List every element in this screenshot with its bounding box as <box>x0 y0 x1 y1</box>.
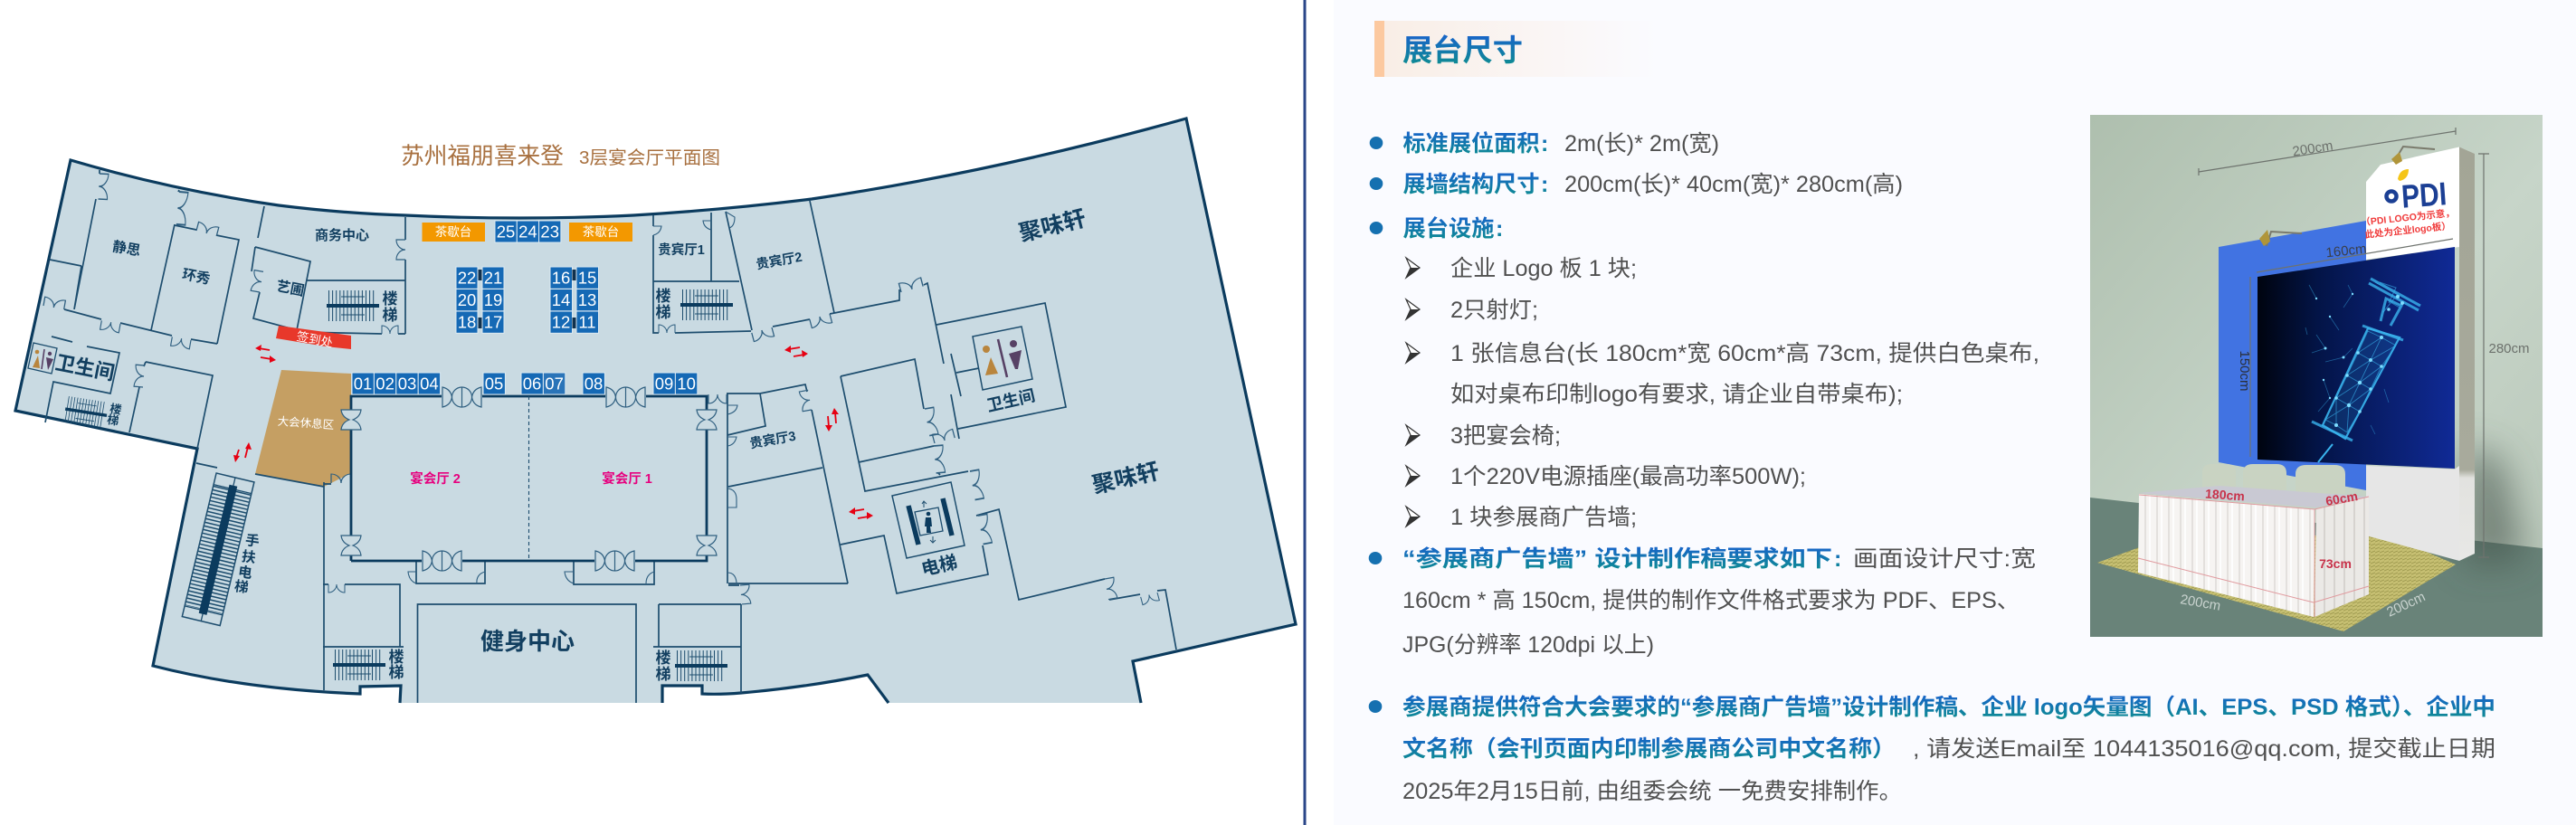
logo: PDI: PDI <box>2400 175 2448 215</box>
booth numbers: 18 <box>458 313 476 331</box>
room labels: 楼 <box>655 288 671 305</box>
facility lines: 1个220V电源插座(最高功率500W); <box>1450 464 1806 489</box>
dimension labels: 73cm <box>2319 556 2352 571</box>
item: submission notice: 文名称（会刊页面内印制参展商公司中文名称） <box>1402 735 1896 762</box>
room labels: 卫生间 <box>53 351 117 384</box>
room labels: 环秀 <box>181 266 212 288</box>
label: banquet hall 2: 宴会厅 2 <box>410 470 461 487</box>
room labels: 梯 <box>233 578 250 596</box>
floor area fill <box>15 119 1296 703</box>
booth numbers: 23 <box>540 223 559 241</box>
chairs <box>2202 464 2345 494</box>
item: wall size: 展墙结构尺寸 <box>1402 172 1540 197</box>
booth numbers: 02 <box>375 375 394 393</box>
item: ad wall design requirement: JPG(分辨率 120dpi 以上) <box>1402 632 1654 658</box>
label: banquet hall 1: 宴会厅 1 <box>602 470 652 487</box>
booth numbers: 24 <box>518 223 537 241</box>
item: submission notice: , 请发送Email至 1044135016@qq.com, 提交截止日期 <box>1913 736 2495 762</box>
stair symbols <box>64 296 733 675</box>
white logo board <box>2366 147 2459 260</box>
title: hotel floor plan <box>401 144 720 169</box>
booth numbers: 20 <box>458 290 476 309</box>
dimension labels: 160cm <box>2325 242 2367 261</box>
dimension labels: 150cm <box>2237 350 2252 392</box>
booth numbers: 06 <box>523 375 541 393</box>
outer walls <box>15 119 1296 703</box>
illustration: booth rendering <box>2090 115 2543 637</box>
logo placeholder note: 此处为企业logo板） <box>2364 220 2451 241</box>
item: standard area <box>1370 130 1719 156</box>
item: facilities heading: 展台设施 <box>1402 215 1495 242</box>
item: ad wall design requirement: 160cm * 高 150cm, 提供的制作文件格式要求为 PDF、EPS、 <box>1402 588 2020 613</box>
item: wall size: : <box>1541 172 1548 197</box>
wall backdrop <box>2090 115 2543 637</box>
icon: left restroom sign <box>28 343 57 374</box>
title: hotel floor plan: 苏州福朋喜来登 <box>401 144 564 169</box>
dimension labels: 200cm <box>2384 589 2428 621</box>
item: standard area: : <box>1541 131 1548 156</box>
spot lamps <box>2259 147 2435 246</box>
room labels: 艺圃 <box>275 278 306 299</box>
item: standard area: 2m(长)* 2m(宽) <box>1564 131 1719 156</box>
booth numbers: 21 <box>484 268 502 288</box>
room labels: 梯 <box>106 412 120 428</box>
room labels: 楼 <box>109 402 123 417</box>
booth numbers: 14 <box>552 290 570 309</box>
lounge zone <box>255 370 351 487</box>
panel: floor plan <box>15 119 1296 703</box>
divider line <box>1303 0 1307 825</box>
room labels: 商务中心 <box>315 227 369 243</box>
room labels: 楼 <box>389 649 404 666</box>
item: wall size: 200cm(长)* 40cm(宽)* 280cm(高) <box>1564 172 1903 197</box>
item: ad wall design requirement: 画面设计尺寸:宽 <box>1853 546 2036 572</box>
wall shadow <box>2466 443 2524 565</box>
facility lines: 如对桌布印制logo有要求, 请企业自带桌布); <box>1450 382 1903 407</box>
item: ad wall design requirement <box>1369 545 2036 658</box>
booth blue wall <box>2219 221 2366 490</box>
sign-in desk: 签到处 <box>296 328 335 350</box>
doors <box>43 174 1159 605</box>
logo: PDI <box>2387 169 2448 215</box>
facility lines <box>1450 256 2039 530</box>
booth numbers: 16 <box>552 268 570 288</box>
carpet <box>2097 536 2456 631</box>
dimension labels: 180cm <box>2205 486 2245 504</box>
dimension labels: 200cm <box>2179 592 2222 614</box>
item: facilities heading <box>1370 215 1503 242</box>
syringe graphic <box>2305 279 2420 462</box>
exhibitor booths <box>352 221 698 394</box>
white lower wall <box>2366 466 2459 561</box>
room labels: 电 <box>237 564 253 582</box>
room labels: 手 <box>244 531 261 550</box>
booth numbers: 05 <box>485 375 503 393</box>
booth numbers: 04 <box>420 375 439 393</box>
icon: right restroom sign <box>973 327 1032 390</box>
facility lines: 1 张信息台(长 180cm*宽 60cm*高 73cm, 提供白色桌布, <box>1450 341 2039 366</box>
booth numbers: 03 <box>398 375 416 393</box>
facility lines: 2只射灯; <box>1450 298 1538 323</box>
booth numbers: 01 <box>354 375 372 393</box>
room labels: 聚味轩 <box>1016 205 1088 247</box>
booth numbers: 12 <box>552 313 570 331</box>
facility lines: 1 块参展商广告墙; <box>1450 505 1637 530</box>
lounge zone: 大会休息区 <box>277 414 335 431</box>
room labels: 贵宾厅1 <box>658 242 705 258</box>
dimension lines <box>2199 128 2489 557</box>
facility lines: 企业 Logo 板 1 块; <box>1450 256 1637 281</box>
booth side panel <box>2459 147 2475 561</box>
room labels: 贵宾厅2 <box>755 249 803 272</box>
info table <box>2138 486 2369 617</box>
graphic screen <box>2258 247 2455 469</box>
arrows: red direction arrows <box>233 345 873 519</box>
room labels <box>53 205 1162 683</box>
room labels: 楼 <box>382 290 398 308</box>
item: submission notice: 参展商提供符合大会要求的“参展商广告墙”设计制作稿、企业 logo矢量图（AI、EPS、PSD 格式）、企业中 <box>1402 694 2495 720</box>
dimension labels: 280cm <box>2488 341 2530 356</box>
heading: 展台尺寸 <box>1374 21 1657 77</box>
arrow bullets <box>1406 258 1420 526</box>
item: standard area: 标准展位面积 <box>1402 130 1540 156</box>
booth numbers: 15 <box>578 268 596 288</box>
booth numbers: 25 <box>497 223 515 241</box>
booth numbers: 10 <box>677 375 696 393</box>
floor <box>2090 498 2543 637</box>
dimension labels: 60cm <box>2324 488 2359 508</box>
booth numbers: 22 <box>458 268 476 288</box>
booth numbers: 13 <box>578 290 596 309</box>
panel: right background <box>1334 0 2576 825</box>
item: submission notice: 2025年2月15日前, 由组委会统 一免费安排制作。 <box>1402 779 1902 804</box>
logo placeholder note <box>2361 207 2455 241</box>
booth numbers: 09 <box>655 375 673 393</box>
booth numbers: 17 <box>484 313 502 331</box>
room labels: 楼 <box>655 650 671 667</box>
heading: 展台尺寸: 展台尺寸 <box>1402 33 1523 67</box>
interior walls <box>45 170 1176 703</box>
booth numbers: 07 <box>545 375 564 393</box>
room labels: 梯 <box>655 304 671 321</box>
room labels: 梯 <box>389 664 404 681</box>
booth numbers: 19 <box>484 290 502 309</box>
room labels: 卫生间 <box>985 386 1037 415</box>
room labels: 电梯 <box>919 552 959 580</box>
item: ad wall design requirement: : <box>1834 546 1841 572</box>
booth numbers: 11 <box>578 313 596 331</box>
escalator <box>182 473 254 626</box>
facility lines: 3把宴会椅; <box>1450 423 1561 449</box>
item: facilities heading: : <box>1496 216 1503 242</box>
tea break desks: 茶歇台 <box>583 225 619 239</box>
list: booth specifications <box>1369 130 2495 804</box>
booth pillars <box>478 270 575 328</box>
room labels: 扶 <box>241 548 257 566</box>
title: hotel floor plan: 3层宴会厅平面图 <box>579 147 720 168</box>
tea break desks: 茶歇台 <box>435 225 471 239</box>
room labels: 健身中心 <box>480 628 575 655</box>
room labels: 贵宾厅3 <box>748 428 797 451</box>
room labels: 聚味轩 <box>1090 459 1162 498</box>
booth numbers: 08 <box>585 375 603 393</box>
item: wall size <box>1370 172 1903 197</box>
room labels: 梯 <box>382 307 398 324</box>
room labels: 梯 <box>655 666 671 683</box>
item: ad wall design requirement: “参展商广告墙” 设计制作稿要求如下 <box>1402 545 1832 572</box>
item: submission notice <box>1369 694 2495 804</box>
dimension labels: 200cm <box>2292 138 2334 159</box>
logo placeholder note: （PDI LOGO为示意， <box>2361 207 2455 228</box>
tea break desks <box>422 223 632 242</box>
sign-in desk <box>276 326 351 350</box>
banquet hall walls <box>341 387 717 571</box>
booth numbers <box>354 223 696 393</box>
icon: elevator <box>892 482 965 558</box>
dimension labels <box>2179 138 2530 621</box>
sub-list: facilities <box>1406 256 2039 530</box>
room labels: 静思 <box>111 238 142 260</box>
